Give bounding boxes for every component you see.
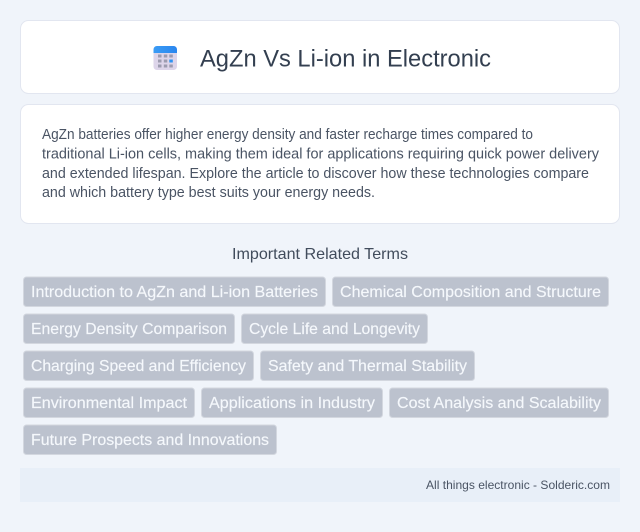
icon: calendar	[154, 46, 177, 70]
tag	[260, 351, 474, 380]
footer: All things electronic - Solderic.com	[426, 478, 610, 492]
panel: summary paragraph: traditional Li-ion cells, making them ideal for applications requiring quick power delivery	[42, 146, 600, 162]
tag: Chemical Composition and Structure	[340, 284, 601, 301]
tag: Cycle Life and Longevity	[249, 321, 420, 338]
tag: Environmental Impact	[31, 395, 188, 412]
tag: Safety and Thermal Stability	[268, 358, 467, 375]
tag: Introduction to AgZn and Li-ion Batteries	[31, 284, 318, 301]
tag	[24, 425, 276, 454]
heading: related terms: Important Related Terms	[232, 246, 408, 263]
panel: summary paragraph: and extended lifespan. Explore the article to discover how these technologies compare	[42, 166, 589, 182]
tag: Cost Analysis and Scalability	[397, 395, 601, 412]
panel: summary paragraph	[20, 104, 620, 224]
tag	[390, 388, 608, 418]
title: AgZn Vs Li-ion in Electronic	[200, 46, 491, 72]
tag	[24, 388, 194, 418]
tag	[24, 277, 326, 306]
tag	[24, 314, 234, 344]
tag	[242, 314, 428, 344]
tag: Charging Speed and Efficiency	[31, 358, 246, 375]
tag	[202, 388, 382, 418]
tag	[332, 277, 608, 306]
tag	[24, 351, 254, 380]
panel: summary paragraph: and which battery type best suits your energy needs.	[42, 185, 375, 201]
tag: Future Prospects and Innovations	[31, 432, 269, 449]
tag: Applications in Industry	[209, 395, 375, 412]
header panel	[20, 20, 620, 94]
panel: summary paragraph: AgZn batteries offer higher energy density and faster recharge times compared to	[42, 127, 533, 143]
footer	[20, 468, 620, 502]
tag list	[24, 277, 608, 454]
tag: Energy Density Comparison	[31, 321, 227, 338]
